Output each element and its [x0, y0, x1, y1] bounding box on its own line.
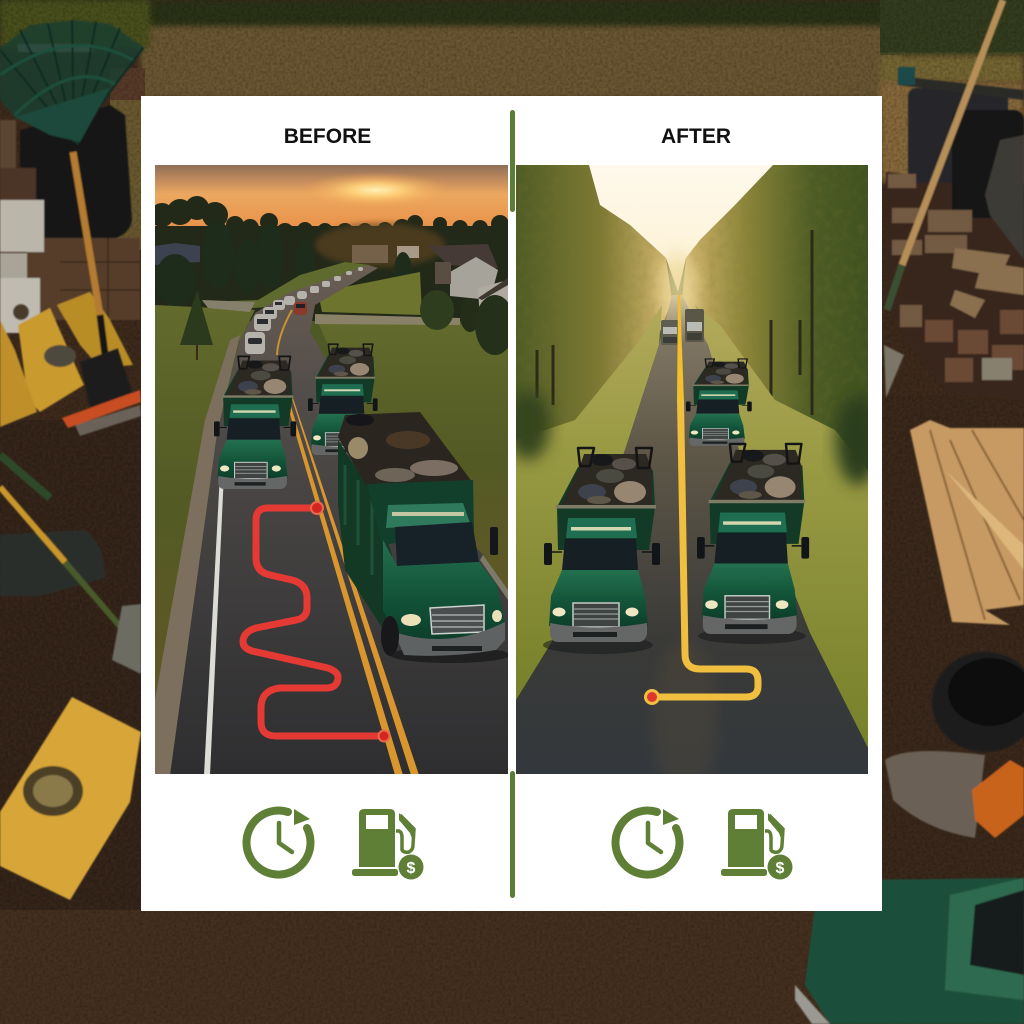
trowel — [885, 751, 985, 838]
icon: after clock — [616, 809, 680, 875]
icon: before clock — [247, 809, 311, 875]
center divider — [508, 110, 516, 898]
icon: before fuel pump with dollar — [352, 809, 424, 880]
yellow sacks — [57, 292, 133, 368]
trees — [159, 224, 412, 270]
small truck 2 in distance — [685, 309, 704, 342]
before heading: BEFORE — [284, 125, 371, 148]
long handle — [902, 0, 1003, 265]
toy truck — [805, 878, 1024, 1024]
left props: rake, barrel, blocks, sacks, shovels — [0, 20, 145, 900]
barrels — [908, 88, 1008, 183]
grass verges — [516, 305, 662, 700]
leaf rake — [0, 20, 145, 145]
yellow direct route — [646, 295, 758, 704]
right front truck — [697, 444, 809, 634]
mid truck — [686, 359, 752, 446]
stacked blocks — [0, 120, 44, 333]
small truck 1 in distance — [661, 320, 679, 345]
foreground trees — [180, 290, 515, 360]
tree line — [150, 196, 509, 321]
sky wedge — [589, 165, 773, 292]
before photo: congested suburban road at sunset — [150, 165, 515, 775]
truck shadows — [543, 631, 806, 654]
after photo: clear forest road at sunrise — [506, 165, 880, 800]
bricks left — [27, 238, 140, 320]
large truck — [338, 412, 510, 663]
bottom-left shovel and bag — [0, 530, 105, 596]
brick pile — [885, 172, 1024, 400]
tree trunks — [537, 230, 812, 415]
icon: after fuel pump with dollar: $ — [776, 860, 785, 877]
red winding route — [243, 502, 390, 742]
road — [516, 295, 868, 774]
lawns — [202, 262, 370, 310]
barrel — [20, 105, 132, 245]
queue of cars — [245, 267, 363, 354]
yellow bag — [0, 697, 141, 900]
comparison panel — [141, 96, 882, 911]
after heading: AFTER — [661, 125, 731, 148]
icon: after fuel pump with dollar — [721, 809, 792, 880]
right props: barrels, bricks, planks, bucket, shovel, toy truck — [795, 0, 1024, 1024]
left front truck — [544, 448, 660, 642]
icon: before fuel pump with dollar: $ — [407, 860, 416, 877]
crossing paths — [202, 300, 255, 312]
rim behind rake — [18, 44, 93, 52]
houses — [155, 243, 508, 307]
truck 1 — [214, 356, 296, 489]
wood planks — [910, 420, 1024, 625]
bucket — [932, 652, 1024, 752]
road — [170, 265, 508, 775]
tree walls — [522, 165, 672, 430]
truck 2 — [308, 344, 378, 455]
